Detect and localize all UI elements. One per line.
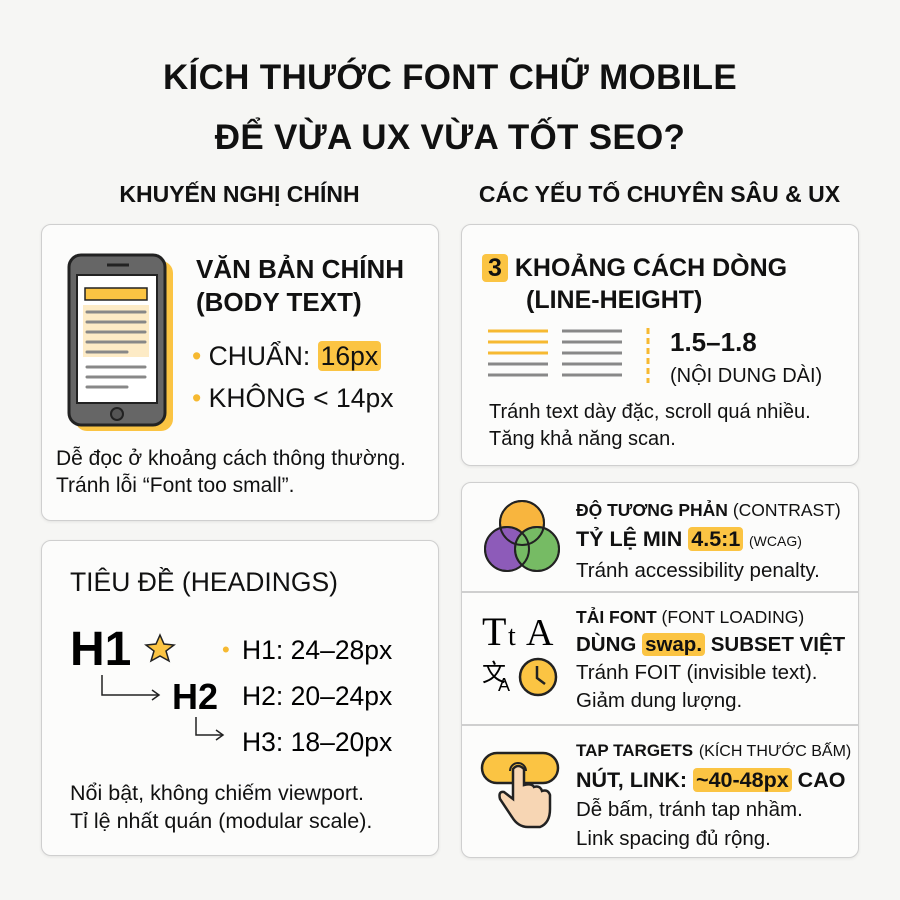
text: note: Tránh lỗi “Font too small”.: [56, 474, 294, 497]
bullets: sizes: • KHÔNG < 14px: [192, 383, 393, 413]
text: note: Tránh text dày đặc, scroll quá nhiều.: [489, 401, 811, 423]
heading: body text: VĂN BẢN CHÍNH: [196, 254, 404, 284]
icon: text lines: [488, 328, 650, 383]
text: note: [56, 446, 406, 497]
text: tap targets: TAP TARGETS (KÍCH THƯỚC BẤM): [576, 741, 851, 760]
diagram: heading hierarchy: H3: 18–20px: [242, 727, 392, 757]
panel: line height: [461, 224, 859, 466]
text: contrast: Tránh accessibility penalty.: [576, 559, 820, 582]
bullets: sizes: • CHUẨN: 16px: [192, 341, 378, 371]
icon: font loading: A: [526, 612, 554, 654]
text: value: 1.5–1.8: [670, 327, 757, 357]
text: tap targets: NÚT, LINK: ~40-48px CAO: [576, 768, 845, 792]
text: note: [489, 401, 811, 450]
text: note: Dễ đọc ở khoảng cách thông thường.: [56, 447, 406, 470]
icon: color wheel: [484, 500, 560, 572]
title: KÍCH THƯỚC FONT CHỮ MOBILE: [163, 58, 737, 97]
heading: line height: (LINE-HEIGHT): [526, 286, 702, 314]
text: contrast: [576, 500, 841, 582]
text: value: (NỘI DUNG DÀI): [670, 365, 822, 387]
text: font loading: [576, 607, 845, 712]
text: font loading: Giảm dung lượng.: [576, 689, 742, 712]
diagram: heading hierarchy: [70, 623, 392, 757]
text: note: Tăng khả năng scan.: [489, 428, 676, 450]
icon: font loading: 文: [482, 653, 506, 688]
icon: font loading: t: [508, 621, 516, 652]
heading: body text: (BODY TEXT): [196, 287, 362, 317]
icon: tap hand: [480, 752, 560, 828]
text: contrast: TỶ LỆ MIN 4.5:1 (WCAG): [576, 527, 802, 551]
text: note: Nổi bật, không chiếm viewport.: [70, 781, 364, 805]
text: value: [670, 327, 822, 387]
icon: phone: [68, 254, 173, 431]
panel: UX factors: [461, 482, 859, 858]
text: font loading: Tránh FOIT (invisible text).: [576, 661, 818, 684]
bullets: sizes: [192, 341, 394, 413]
diagram: heading hierarchy: •: [222, 637, 230, 662]
diagram: heading hierarchy: H2: 20–24px: [242, 681, 392, 711]
heading: left column: KHUYẾN NGHỊ CHÍNH: [119, 181, 360, 207]
heading: right column: CÁC YẾU TỐ CHUYÊN SÂU & UX: [479, 181, 840, 207]
text: contrast: ĐỘ TƯƠNG PHẢN (CONTRAST): [576, 500, 841, 520]
title: ĐỂ VỪA UX VỪA TỐT SEO?: [215, 118, 685, 157]
text: font loading: DÙNG swap. SUBSET VIỆT: [576, 633, 845, 656]
text: tap targets: [576, 741, 851, 850]
text: tap targets: Link spacing đủ rộng.: [576, 827, 771, 850]
title: [163, 58, 737, 157]
icon: font loading: [482, 611, 558, 696]
text: note: Tỉ lệ nhất quán (modular scale).: [70, 809, 372, 833]
text: note: [70, 781, 372, 833]
heading: body text: [196, 254, 404, 317]
text: tap targets: Dễ bấm, tránh tap nhầm.: [576, 798, 803, 821]
icon: font loading: A: [498, 675, 510, 695]
text: font loading: TẢI FONT (FONT LOADING): [576, 607, 804, 627]
panel: headings: [41, 540, 439, 856]
heading: line height: [482, 254, 787, 314]
diagram: heading hierarchy: H1: [70, 623, 131, 676]
diagram: heading hierarchy: H1: 24–28px: [242, 635, 392, 665]
panel: body text: [41, 224, 439, 521]
diagram: heading hierarchy: H2: [172, 676, 218, 717]
heading: headings: TIÊU ĐỀ (HEADINGS): [70, 567, 338, 597]
heading: line height: 3 KHOẢNG CÁCH DÒNG: [488, 254, 787, 282]
